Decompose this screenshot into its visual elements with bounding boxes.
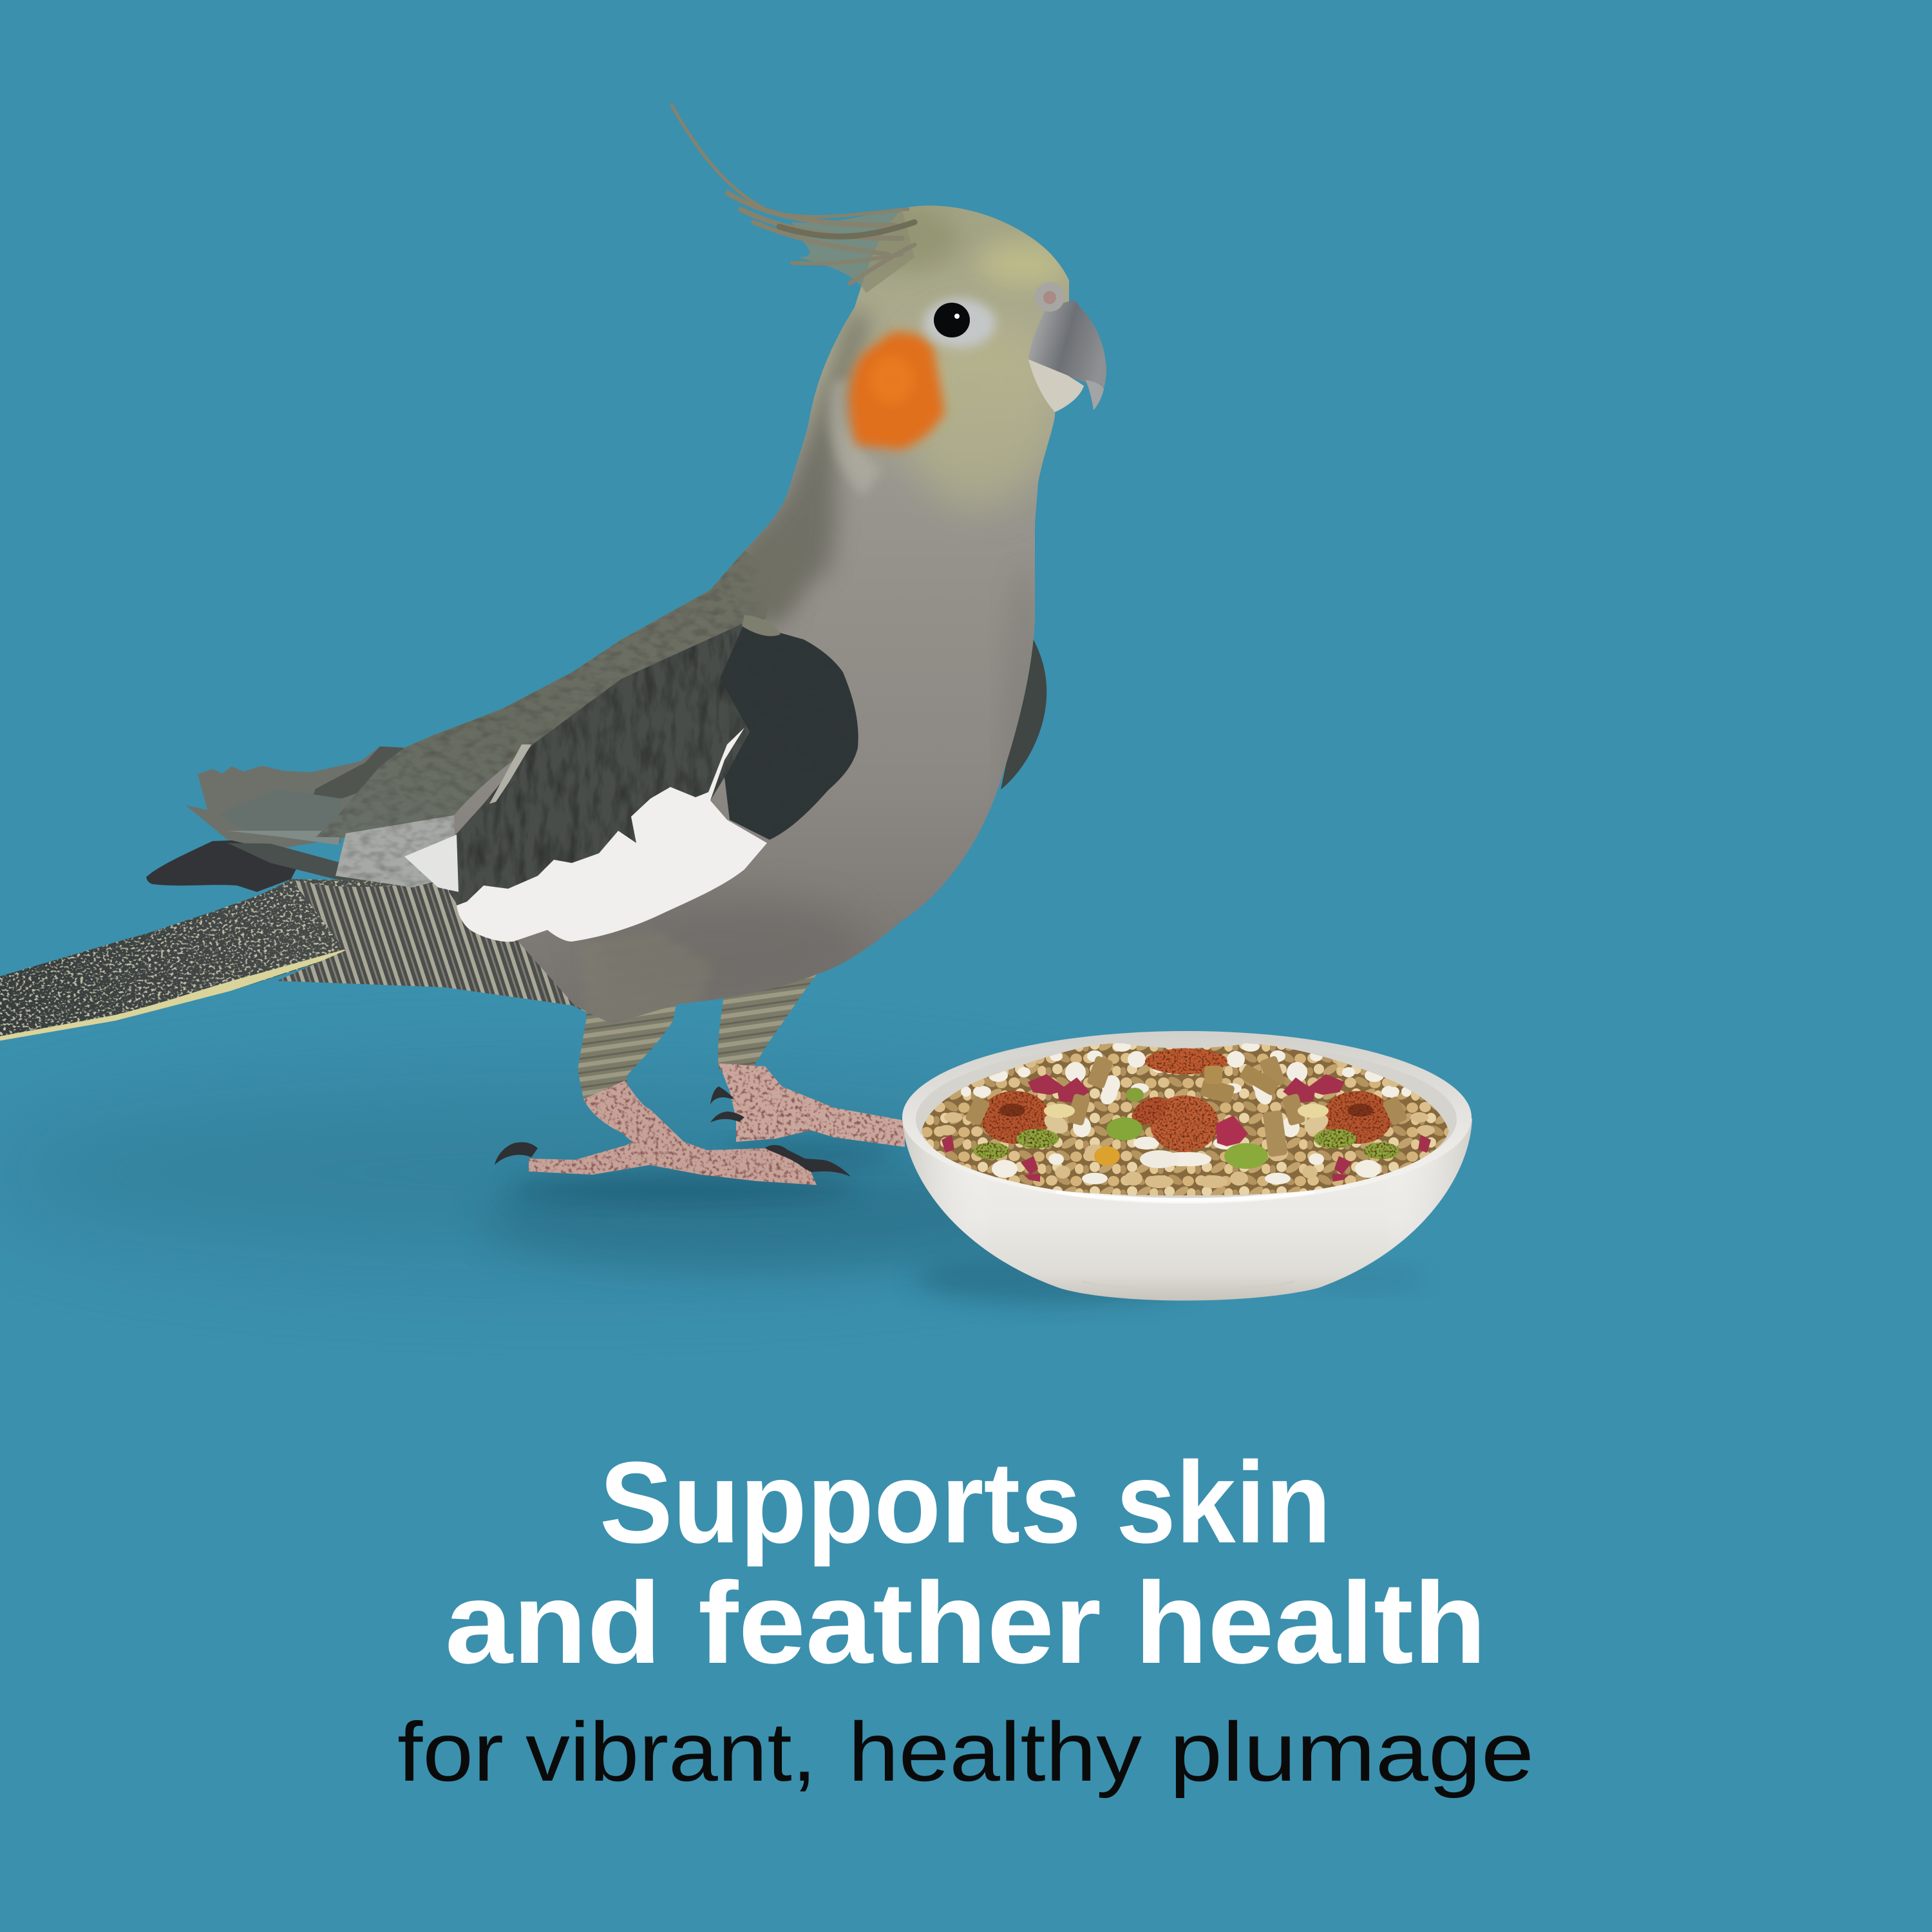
claws near foot (495, 1142, 851, 1177)
cockatiel bird (0, 105, 1106, 1185)
ring kibble (980, 1091, 1050, 1144)
pale seeds (1041, 1104, 1075, 1137)
white wing patch (457, 728, 767, 942)
eye (923, 299, 996, 348)
near leg (495, 992, 851, 1185)
tail yellow edge (0, 949, 345, 1041)
red pieces (942, 1074, 1090, 1182)
bowl rim (902, 1031, 1472, 1204)
subheading (397, 1705, 1534, 1799)
beak (1028, 282, 1106, 412)
food left half (938, 1041, 1202, 1188)
bowl foot line (1082, 1282, 1294, 1291)
near foot (529, 1081, 817, 1185)
claws far foot (710, 1086, 744, 1122)
orange cheek patch (849, 332, 945, 450)
headline: and (445, 1558, 661, 1688)
back blend into chest (744, 535, 795, 625)
bowl body (902, 1117, 1472, 1301)
far tail feathers (146, 746, 449, 896)
bowl front highlight (1056, 1191, 1314, 1200)
seed base (914, 1037, 1455, 1204)
food right half mirrored (1170, 1041, 1435, 1188)
pale neck stripe (828, 380, 882, 496)
headline: feather (698, 1558, 1101, 1688)
headline: skin (1116, 1438, 1331, 1567)
far wing behind chest (1001, 638, 1046, 790)
infographic canvas (0, 103, 1530, 1798)
crown shading (894, 206, 960, 273)
white seeds (961, 1041, 1202, 1184)
headline: Supports (600, 1438, 1081, 1567)
lower belly shading (620, 900, 851, 984)
bowl side shading (902, 1117, 1472, 1301)
bowl inner wall (916, 1041, 1457, 1198)
neck shading (744, 305, 877, 607)
body and head (404, 205, 1069, 1024)
mid wing feathers (449, 623, 750, 914)
bird food mix (914, 1037, 1455, 1204)
headline (445, 1438, 1486, 1688)
tan pellets (965, 1056, 1113, 1126)
far foot (719, 1063, 905, 1147)
headline: health (1135, 1558, 1486, 1688)
crest feathers (672, 105, 914, 293)
subheading: healthy (848, 1705, 1142, 1799)
subheading: vibrant, (526, 1705, 817, 1799)
ground shadow (0, 1082, 1423, 1304)
food bowl (902, 1031, 1472, 1301)
center pieces (1094, 1064, 1288, 1169)
pale wing feathers (336, 744, 531, 892)
yellow face tint (912, 385, 1055, 510)
subheading: for (397, 1705, 504, 1799)
back and wing coverts (316, 551, 770, 837)
shoulder feather tuft (742, 615, 781, 636)
center kibble (1127, 1048, 1227, 1152)
dark wing shoulder (720, 623, 858, 840)
beige grains (938, 1057, 1173, 1188)
subheading: plumage (1170, 1705, 1534, 1799)
far leg (710, 974, 905, 1147)
barred undertail (277, 879, 618, 1024)
speckled tail (0, 879, 464, 1041)
green pieces (973, 1129, 1059, 1159)
barred flank (580, 927, 715, 1024)
